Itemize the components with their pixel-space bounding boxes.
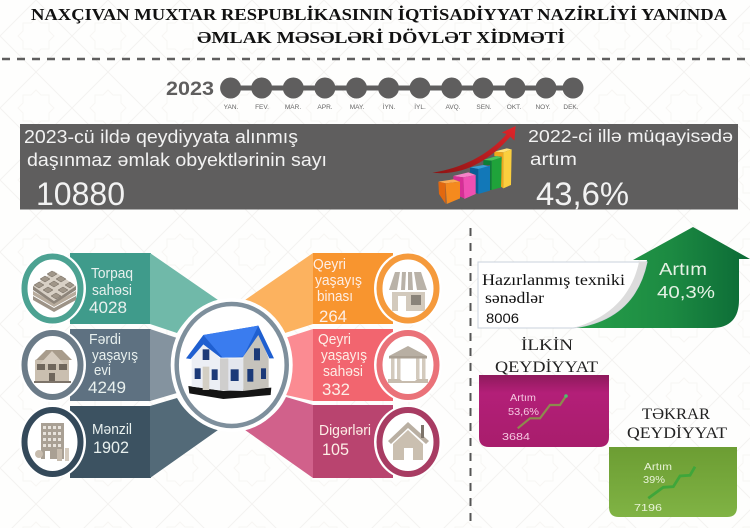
labels: left categories: sahəsi: [92, 283, 132, 299]
timeline 2023: MAY.: [350, 104, 364, 111]
labels: left categories: 1902: [93, 438, 129, 457]
text: registered objects count: daşınmaz əmlak obyektlərinin sayı: [27, 150, 327, 170]
icon: home: [374, 405, 442, 479]
text: increase vs 2022: artım: [530, 149, 577, 169]
text: growth percent: Artım: [659, 259, 707, 279]
text: prepared documents: [482, 272, 626, 326]
timeline 2023: 2023: [166, 79, 214, 100]
timeline 2023: MAR.: [285, 104, 301, 111]
timeline 2023: FEV.: [255, 104, 269, 111]
panel: initial registration chart: 3684: [502, 431, 530, 443]
icon: land plots: [19, 252, 86, 326]
panel: repeat registration chart: Artım: [644, 461, 672, 473]
heading: initial registration: [495, 336, 598, 376]
panel: repeat registration chart: [609, 447, 737, 517]
text: prepared documents: Hazırlanmış texniki: [482, 272, 626, 289]
text: registered objects count: [24, 127, 327, 212]
labels: left categories: [88, 266, 138, 457]
icon: house: [19, 328, 86, 402]
timeline 2023: AVQ.: [445, 104, 461, 111]
labels: left categories: yaşayış: [92, 348, 138, 364]
labels: left categories: Torpaq: [91, 266, 133, 282]
timeline 2023: [166, 78, 584, 111]
heading: initial registration: QEYDİYYAT: [495, 358, 598, 376]
labels: right categories: Qeyri: [313, 257, 346, 273]
labels: left categories: 4249: [88, 378, 126, 397]
panel: initial registration chart: [479, 375, 609, 447]
labels: left categories: evi: [94, 363, 111, 379]
band: Mənzil: [70, 398, 218, 478]
timeline 2023: İYN.: [383, 102, 396, 111]
band: Torpaq sahəsi: [70, 253, 218, 333]
labels: right categories: 105: [322, 441, 349, 459]
text: growth percent: 40,3%: [657, 282, 715, 302]
heading: repeat registration: [627, 406, 727, 442]
band: Digərləri: [245, 397, 393, 478]
panel: repeat registration chart: 7196: [634, 502, 662, 514]
labels: right categories: binası: [317, 289, 353, 305]
text: growth percent: [657, 259, 715, 302]
text: increase vs 2022: [528, 126, 733, 212]
icon: shop: [374, 252, 442, 326]
icon: apartment building: [19, 405, 86, 479]
heading: initial registration: İLKİN: [521, 336, 574, 354]
text: increase vs 2022: 2022-ci illə müqayisədə: [528, 126, 733, 146]
text: registered objects count: 10880: [36, 176, 125, 212]
panel: left categories: [19, 252, 218, 479]
labels: right categories: yaşayış: [315, 273, 362, 289]
panel: repeat registration chart: 39%: [643, 474, 665, 486]
panel: initial registration chart: Artım: [510, 392, 536, 404]
panel: total registered objects: [20, 124, 738, 212]
text: increase vs 2022: 43,6%: [536, 176, 629, 212]
timeline 2023: SEN.: [476, 104, 492, 111]
text: registered objects count: 2023-cü ildə qeydiyyata alınmış: [24, 127, 298, 147]
timeline 2023: YAN.: [224, 104, 239, 111]
heading: repeat registration: QEYDİYYAT: [627, 424, 727, 442]
labels: right categories: sahəsi: [323, 364, 363, 380]
band: Qeyri yaşayış binası: [245, 253, 393, 333]
icon: rising bar chart: [432, 126, 516, 204]
labels: right categories: 264: [319, 308, 347, 326]
arrow: growth: [573, 227, 750, 328]
timeline 2023: DEK.: [563, 104, 579, 111]
panel: technical documents with green arrow: [478, 227, 750, 328]
timeline 2023: APR.: [317, 104, 333, 111]
labels: right categories: Digərləri: [319, 423, 371, 439]
panel: initial registration chart: 53,6%: [508, 406, 539, 418]
band: Qeyri yaşayış sahəsi: [285, 329, 393, 401]
labels: left categories: Mənzil: [92, 422, 132, 438]
white label box: [478, 262, 647, 328]
labels: right categories: Qeyri: [318, 332, 351, 348]
band: Fərdi yaşayış evi: [70, 329, 177, 401]
icon: blue-roof house: [186, 326, 274, 399]
timeline 2023: OKT.: [507, 104, 521, 111]
labels: left categories: Fərdi: [89, 332, 121, 348]
central house emblem: [171, 298, 293, 432]
timeline 2023: NOY.: [535, 104, 551, 111]
title: [31, 5, 727, 47]
text: prepared documents: 8006: [486, 310, 519, 326]
labels: left categories: 4028: [89, 298, 127, 317]
title: ƏMLAK MƏSƏLƏRİ DÖVLƏT XİDMƏTİ: [197, 28, 565, 47]
icon: public building: [374, 328, 442, 402]
timeline 2023: İYL.: [414, 102, 426, 111]
title: NAXÇIVAN MUXTAR RESPUBLİKASININ İQTİSADİYYAT NAZİRLİYİ YANINDA: [31, 5, 727, 24]
text: prepared documents: sənədlər: [485, 290, 545, 307]
labels: right categories: 332: [322, 381, 350, 399]
heading: repeat registration: TƏKRAR: [642, 406, 710, 423]
labels: right categories: [313, 257, 371, 459]
labels: right categories: yaşayış: [321, 348, 367, 364]
panel: right categories: [245, 252, 442, 479]
